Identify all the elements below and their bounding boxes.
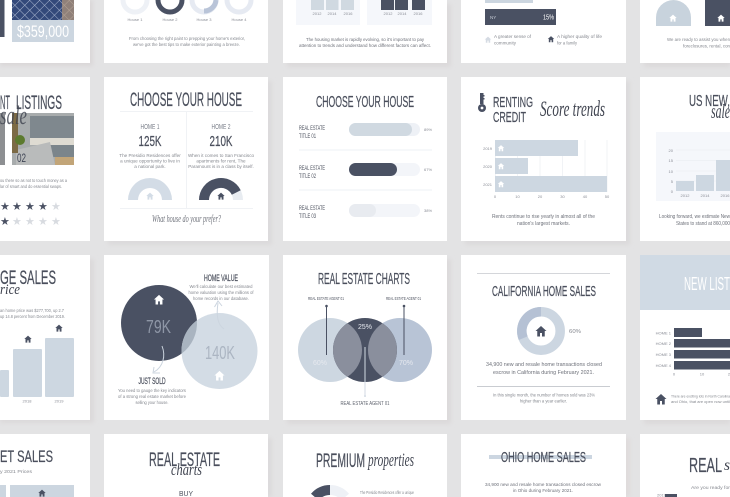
home 1 column: a national park. [134,164,166,169]
bar chart [656,132,730,201]
photo: kitchen: 02 [17,151,26,165]
caption [492,214,595,227]
price tag: $359,000 [17,22,69,41]
value labels [313,324,413,367]
star ratings: ★ [12,201,22,213]
row 2 [299,163,432,180]
percent: 60% [569,329,581,335]
caption: From choosing the right paint to prepping your home's exterior, [129,36,245,41]
value labels: 60% [313,360,327,367]
just sold text: You need to gauge the key indicators [118,388,187,393]
value 79K: 79K [146,317,171,337]
just sold text: selling your house. [136,400,168,405]
photo: patterned rug [12,0,74,20]
icon: home light circle [214,371,225,381]
horizontal bar chart: 20 [538,194,543,199]
home 1 column: a unique opportunity to live in [120,158,180,164]
pointer center [340,347,390,407]
home value text: home records in our database. [193,296,249,301]
ring chart house 1 [123,0,147,12]
value 140K: 140K [205,343,235,363]
row 3: TITLE 03 [299,214,316,220]
heading [493,94,533,126]
footnote: In this single month, the number of homes sold was 23% [493,392,595,398]
subheading: y 2021 Prices [0,469,33,474]
value labels: 25% [358,324,372,331]
script accent: properties [367,450,414,471]
donut chart [522,312,560,350]
ring labels: House 1 [128,17,143,22]
caption [0,178,67,189]
caption: 34,900 new and resale home transactions closed [486,362,602,368]
just sold text: JUST SOLD [138,376,166,386]
legend community: A greater sense of [494,34,532,39]
home 1 column: 125K [138,133,162,150]
footnote: higher than a year earlier. [520,398,567,404]
legend family: A higher quality of life [557,34,602,39]
caption: The housing market is rapidly evolving, so it's important to pay [306,37,425,42]
heading: OHIO HOME SALES [501,449,586,466]
footnote [493,392,595,404]
panel: ohio home sales [461,434,630,497]
bar chart: 2014 [701,193,710,198]
heading: NT [0,93,10,114]
home 2 column: Paramount is in a class by itself. [188,164,254,169]
star ratings: ★ [12,216,22,228]
script accent: Score trends [540,96,605,121]
bar chart: 2019 [55,398,64,404]
pointer center: REAL ESTATE AGENT 01 [340,401,390,407]
panel: house ring charts [104,0,268,63]
script accent: charts [171,460,202,479]
ring labels: House 3 [197,17,212,22]
star ratings: ★ [0,201,10,213]
value labels: 70% [399,360,413,367]
heading: CHOOSE YOUR HOUSE [130,90,242,111]
star ratings: ★ [51,216,61,228]
row 3: 38% [424,208,432,213]
ring labels: House 4 [232,17,247,22]
bars [0,485,74,497]
horizontal bar chart: 10 [515,194,520,199]
bar chart: 10 [669,169,674,174]
home value text [188,273,254,301]
chart dark: 2014 [398,11,407,16]
panel: average sales price [0,255,94,423]
caption: in Ohio during February 2021. [513,488,573,493]
star ratings: ★ [0,216,10,228]
caption: up 14.8 percent from December 2019. [0,314,65,319]
gauge home 1 [128,178,172,200]
caption: and Ohio, that are open now until [671,399,730,404]
row 2: 67% [424,167,432,172]
panel: choose your house gauges [104,77,272,245]
home value text: HOME VALUE [204,273,238,283]
bar chart: 0 [671,189,674,194]
panel: choose your house progress bars [283,77,447,241]
horizontal bar chart: 50 [605,194,610,199]
panel: recent listings [0,77,90,241]
script tagline: What house do your prefer? [152,213,221,225]
caption [129,36,245,47]
caption: lar of smart and do essential swaps. [0,184,62,189]
horizontal bar chart: HOME 3 [656,352,672,357]
caption: ou there so as not to touch money as a [0,178,67,183]
pointer left [308,296,344,355]
chart dark: 2012 [384,11,393,16]
caption: nation's largest markets. [517,221,570,227]
chart light [296,0,360,25]
heading [0,93,62,114]
star ratings: ★ [51,201,61,213]
bar chart: 15 [669,158,674,163]
bar chart: 5 [671,179,674,184]
caption [671,394,730,404]
heading: CREDIT [493,109,526,126]
caption [667,37,730,48]
horizontal bar chart: 0 [494,194,497,199]
heading: RENTING [493,94,533,111]
bar NY [485,9,556,25]
panel: new listings [640,255,730,424]
pointer right: REAL ESTATE AGENT 01 [386,296,421,301]
star ratings: ★ [25,201,35,213]
caption: Rents continue to rise yearly in almost all of the [492,214,595,220]
row 2: REAL ESTATE [299,166,325,172]
caption: 34,900 new and resale home transactions closed escrow [485,482,602,487]
header band [640,255,730,310]
icon: home dark circle [154,295,164,305]
horizontal bar chart: 2021 [483,182,493,187]
home 1 column: The Presidio Residences offer [119,153,181,158]
panel: real estate bottom right [640,434,730,497]
panel: price listing top left [0,0,93,66]
icon: home [656,394,666,404]
panel: assist top right [640,0,730,67]
just sold text: of a strong real estate market before [118,394,186,399]
home 2 column: 210K [210,133,232,150]
caption: attention to trends and understand how different factors can affect. [299,43,431,48]
home value text: We'll calculate our best estimated [190,284,253,289]
row 1: 89% [424,127,432,132]
row 1: REAL ESTATE [299,126,325,132]
ring labels: House 2 [163,17,178,22]
horizontal bar chart: 10 [700,372,705,376]
caption [299,37,431,48]
donut chart [315,490,345,497]
caption: escrow in California during February 2021. [493,370,594,376]
row 1: TITLE 01 [299,134,316,140]
row 1 [299,123,432,140]
panel: real estate charts venn [283,255,451,424]
legend community: community [494,40,517,46]
home 2 column: HOME 2 [212,124,231,131]
horizontal bar chart [656,328,730,376]
photo: kitchen [12,113,74,165]
circle overlap [182,320,197,354]
legend family [548,34,602,46]
pointer left: REAL ESTATE AGENT 01 [308,296,344,301]
panel: housing market bars [283,0,451,67]
block dark [705,0,730,26]
circle: dark 79K [121,285,197,361]
heading: ET SALES [0,447,53,466]
chart dark [367,0,432,25]
star ratings: ★ [25,216,35,228]
bar chart: 2016 [721,193,730,198]
arrow: to just sold [153,346,164,373]
panel: us new home sales [640,77,730,241]
heading: REAL ESTATE CHARTS [318,271,410,288]
bar chart: 2012 [681,193,690,198]
star ratings [0,201,61,228]
caption: The Presidio Residences offer a unique [360,490,414,495]
chart light: 2014 [328,11,337,16]
ring chart house 3 [192,0,216,12]
bar chart: 20 [669,148,674,153]
bar chart [0,325,74,404]
legend community [485,34,532,46]
home 1 column [119,124,181,169]
caption [486,362,602,376]
star ratings: ★ [38,216,48,228]
panel: california home sales [461,255,626,420]
horizontal bar chart: 40 [583,194,588,199]
caption [659,214,730,227]
panel: real estate charts bottom [104,434,272,497]
heading: GE SALES [0,268,56,289]
horizontal bar chart: HOME 4 [656,363,672,368]
panel: state bars [461,0,626,63]
script accent: sale [0,101,27,130]
panel: venn home value [104,255,269,420]
script accent: rice [0,282,20,298]
home 2 column: apartments for rent, The [196,158,246,164]
caption: an home price was $277,700, up 2.7 [0,308,64,313]
row 3 [299,204,432,220]
photo left [0,113,5,165]
heading: CHOOSE YOUR HOUSE [316,94,414,111]
bar NY: 15% [543,14,554,22]
arch light [656,0,691,26]
gauge home 2 [199,178,243,200]
bar NY: NY [490,15,496,20]
legend family: for a family [557,40,578,46]
home value text: home valuation using the millions of [188,290,254,295]
horizontal bar chart: 0 [673,372,676,376]
icon: key [478,93,486,112]
home 2 column [188,124,255,169]
ring chart house 2 [158,0,182,12]
home 1 column: HOME 1 [140,124,160,131]
horizontal bar chart: HOME 1 [656,330,672,336]
row 2: TITLE 02 [299,174,316,180]
heading: REAL ESTATE [149,450,220,471]
row 3: REAL ESTATE [299,206,325,212]
chart light: 2012 [313,11,322,16]
home 2 column: When it comes to San Francisco [188,153,255,158]
ring labels [128,17,247,22]
heading: CALIFORNIA HOME SALES [492,284,596,300]
three-circle venn [298,318,432,382]
caption: we've got the best tips to make exterior painting a breeze. [133,42,240,47]
horizontal bar chart: 2019 [483,146,493,151]
horizontal bar chart: 2020 [483,164,493,169]
panel: renting credit [461,77,630,245]
panel: premium properties [283,434,447,497]
caption [485,482,602,493]
horizontal bar chart: HOME 2 [656,341,672,346]
pointer right [386,296,421,355]
arrow: to home value [214,301,224,329]
heading: LISTINGS [16,93,62,114]
chart dark: 2016 [414,11,423,16]
heading: PREMIUM [316,451,365,472]
circle: light 140K [182,313,258,389]
horizontal bar chart [483,140,610,199]
just sold text [118,376,187,405]
caption [0,308,65,319]
caption: Are you ready for [691,485,730,490]
chart light: 2016 [344,11,353,16]
horizontal bar chart: 30 [560,194,565,199]
panel: market sales bottom left [0,434,90,497]
star ratings: ★ [38,201,48,213]
ring chart house 4 [227,0,251,12]
bar chart: 2018 [23,398,32,404]
